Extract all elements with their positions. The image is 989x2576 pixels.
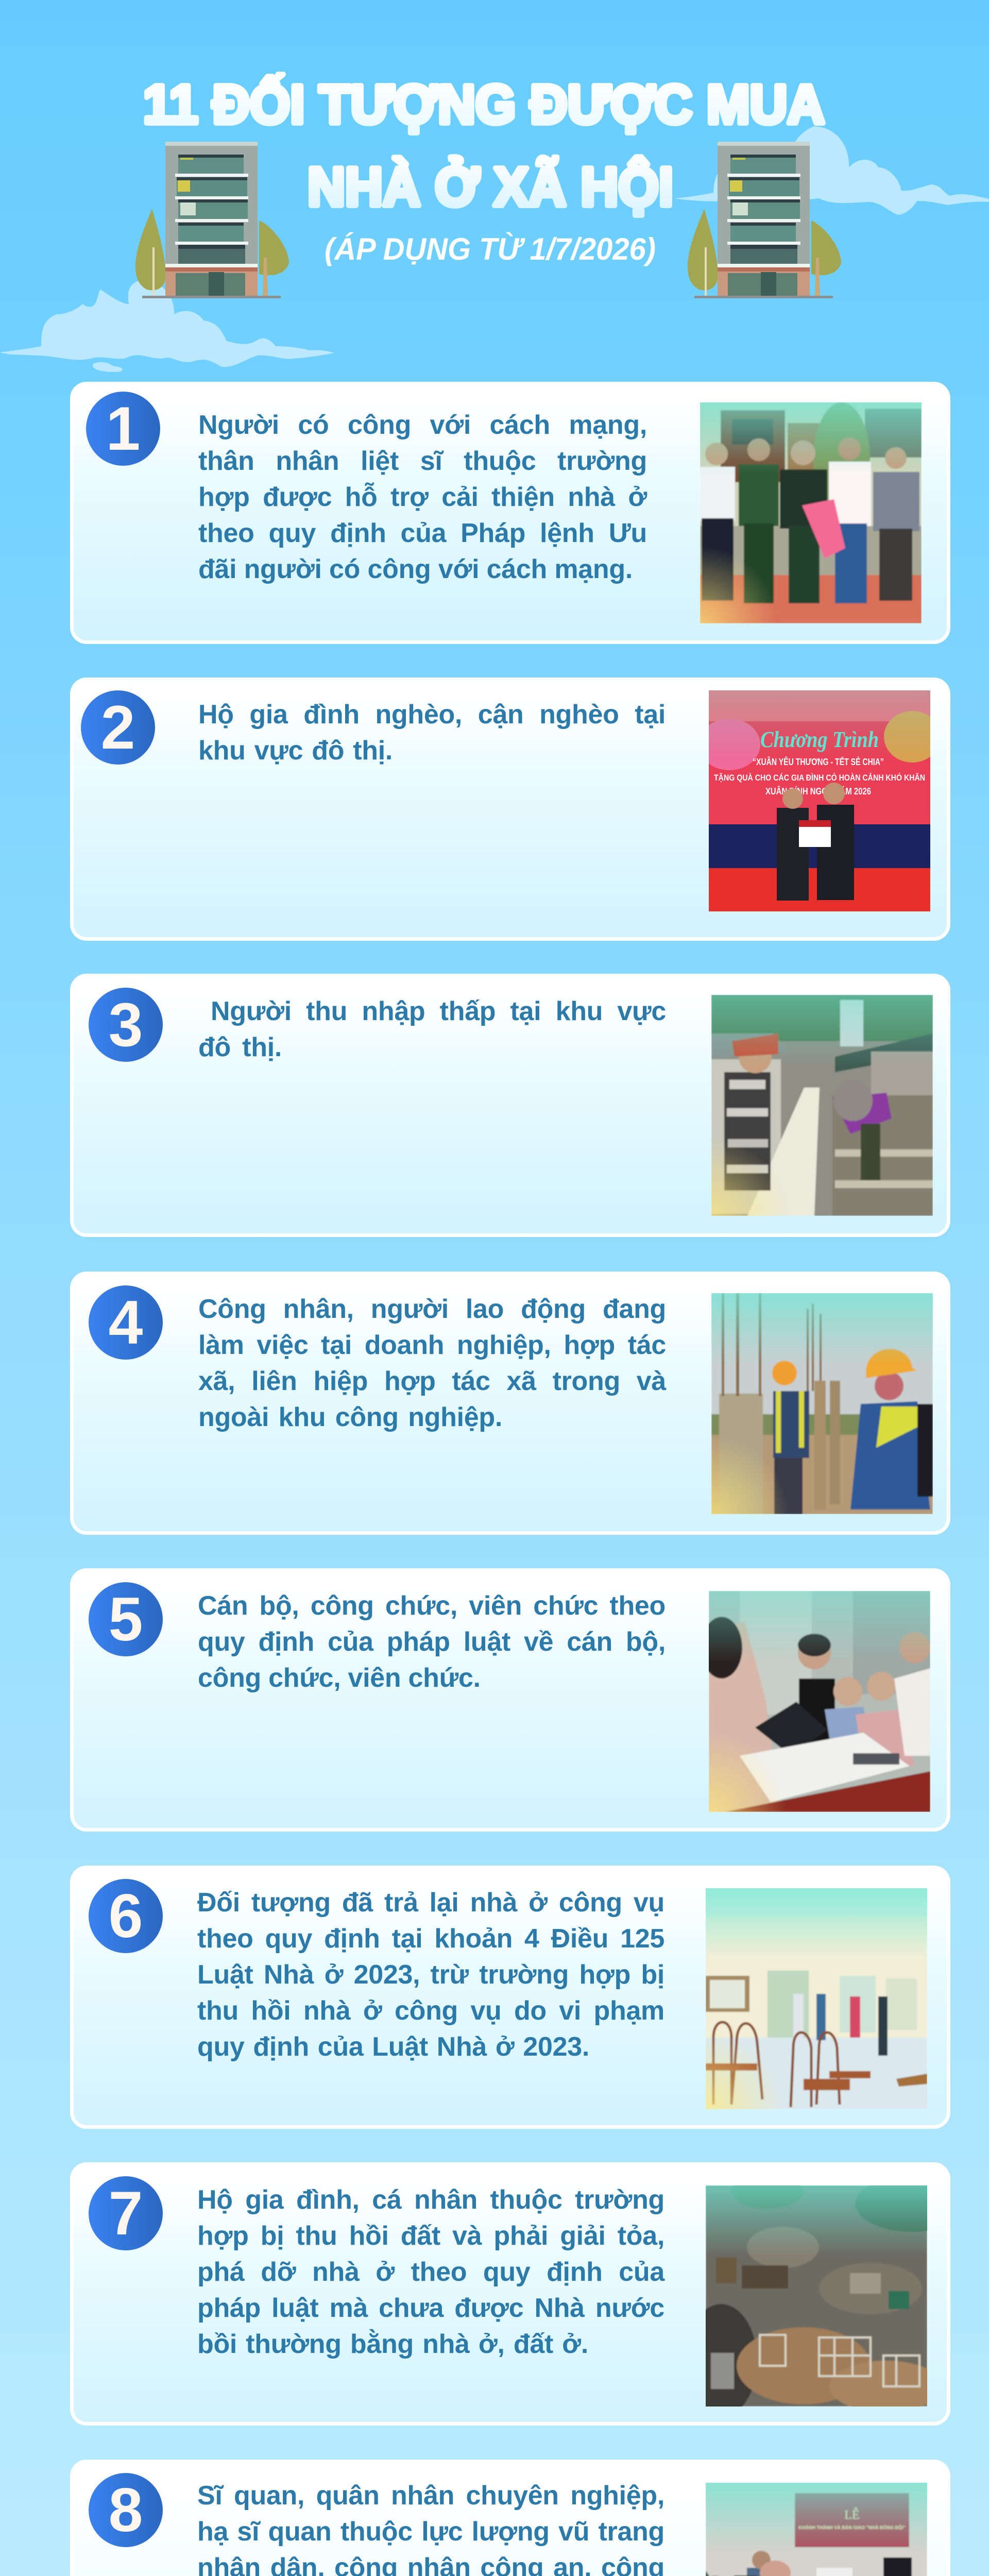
number badge 7: 7 (109, 2179, 143, 2248)
text item 1: thân nhân liệt sĩ thuộc trường (198, 446, 647, 476)
panel: item 4 (70, 1272, 950, 1535)
number badge 6 (89, 1879, 163, 1953)
text item 2 (198, 700, 666, 766)
photo: charity programme stage (709, 690, 930, 911)
number badge 6: 6 (109, 1882, 143, 1951)
text item 3: đô thị. (198, 1032, 282, 1062)
number badge 3: 3 (109, 990, 143, 1059)
number badge 8: 8 (109, 2476, 143, 2545)
title block (143, 72, 826, 266)
panel: item 5 (70, 1568, 950, 1832)
text item 7: phá dỡ nhà ở theo quy định của (197, 2257, 664, 2287)
photo: charity programme stage: “XUÂN YÊU THƯƠNG - TẾT SẺ CHIA” (753, 756, 884, 767)
title line 1: 11 ĐỐI TƯỢNG ĐƯỢC MUA (143, 74, 825, 135)
illustration: apartment building left (135, 142, 289, 298)
text item 1: đãi người có công với cách mạng. (198, 554, 633, 584)
text item 4: Công nhân, người lao động đang (198, 1294, 666, 1324)
cloud: right decoration (675, 126, 989, 215)
text item 5: công chức, viên chức. (198, 1663, 481, 1693)
text item 5: quy định của pháp luật về cán bộ, (198, 1627, 666, 1657)
photo: bricklayers (711, 995, 933, 1216)
text item 8 (197, 2481, 664, 2576)
text item 1 (198, 410, 647, 584)
photo: handover ceremony: LỄ (844, 2508, 860, 2522)
photo: charity programme stage: Chương Trình (760, 727, 879, 752)
text item 4: xã, liên hiệp hợp tác xã trong và (198, 1366, 666, 1396)
text item 3 (198, 996, 666, 1062)
text item 7: pháp luật mà chưa được Nhà nước (197, 2293, 664, 2323)
text item 6 (197, 1888, 664, 2062)
text item 7: hợp bị thu hồi đất và phải giải tỏa, (197, 2221, 664, 2251)
number badge 4: 4 (109, 1288, 143, 1357)
number badge 1: 1 (106, 394, 140, 463)
text item 2: Hộ gia đình nghèo, cận nghèo tại (198, 700, 666, 730)
number badge 2: 2 (101, 693, 135, 762)
text item 5 (198, 1591, 666, 1693)
number badge 5 (89, 1582, 163, 1656)
text item 2: khu vực đô thị. (198, 736, 393, 766)
text item 1: hợp được hỗ trợ cải thiện nhà ở (198, 482, 647, 512)
illustration: apartment building right (688, 142, 841, 298)
photo: service housing hall (706, 1888, 927, 2109)
text item 4: làm việc tại doanh nghiệp, hợp tác (198, 1330, 666, 1360)
photo: officials in a meeting (709, 1591, 930, 1812)
panel: item 3 (70, 974, 950, 1237)
text item 1: theo quy định của Pháp lệnh Ưu (198, 518, 647, 548)
text item 4: ngoài khu công nghiệp. (198, 1402, 502, 1432)
number badge 3 (89, 988, 163, 1062)
text item 4 (198, 1294, 667, 1432)
text item 7: bồi thường bằng nhà ở, đất ở. (197, 2329, 588, 2359)
text item 6: thu hồi nhà ở công vụ do vi phạm (197, 1996, 664, 2026)
text item 6: Đối tượng đã trả lại nhà ở công vụ (197, 1888, 664, 1918)
panel: item 1 (70, 382, 950, 644)
number badge 8 (89, 2473, 163, 2547)
photo: handover ceremony: KHÁNH THÀNH VÀ BÀN GIAO "NHÀ ĐỒNG ĐỘI" (798, 2524, 906, 2530)
photo: construction workers (711, 1293, 933, 1514)
number badge 7 (89, 2176, 163, 2250)
photo: veterans receiving a gift (700, 402, 922, 623)
text item 5: Cán bộ, công chức, viên chức theo (198, 1591, 666, 1621)
panel: item 7 (70, 2162, 950, 2426)
text item 1: Người có công với cách mạng, (198, 410, 647, 440)
text item 7 (197, 2185, 665, 2359)
text item 6: theo quy định tại khoản 4 Điều 125 (197, 1924, 664, 1954)
text item 8: hạ sĩ quan thuộc lực lượng vũ trang (197, 2517, 664, 2547)
panel: item 2 (70, 677, 950, 941)
number badge 2 (81, 690, 155, 765)
panel: item 8 (70, 2460, 950, 2576)
text item 8: Sĩ quan, quân nhân chuyên nghiệp, (197, 2481, 664, 2511)
cloud: left decoration (0, 281, 334, 372)
photo: charity programme stage: XUÂN BÍNH NGỌ - NĂM 2026 (765, 786, 871, 796)
number badge 4 (89, 1285, 163, 1360)
text item 3: Người thu nhập thấp tại khu vực (211, 996, 666, 1026)
number badge 5: 5 (109, 1585, 143, 1654)
subtitle: (ÁP DỤNG TỪ 1/7/2026) (325, 232, 656, 266)
text item 6: quy định của Luật Nhà ở 2023. (197, 2032, 589, 2062)
number badge 1 (86, 392, 160, 466)
panel: item 6 (70, 1866, 950, 2129)
text item 7: Hộ gia đình, cá nhân thuộc trường (197, 2185, 664, 2215)
title line 2: NHÀ Ở XÃ HỘI (308, 157, 673, 217)
photo: aerial view of cleared land (706, 2185, 927, 2406)
text item 6: Luật Nhà ở 2023, trừ trường hợp bị (197, 1960, 664, 1990)
photo: handover ceremony (706, 2483, 927, 2576)
